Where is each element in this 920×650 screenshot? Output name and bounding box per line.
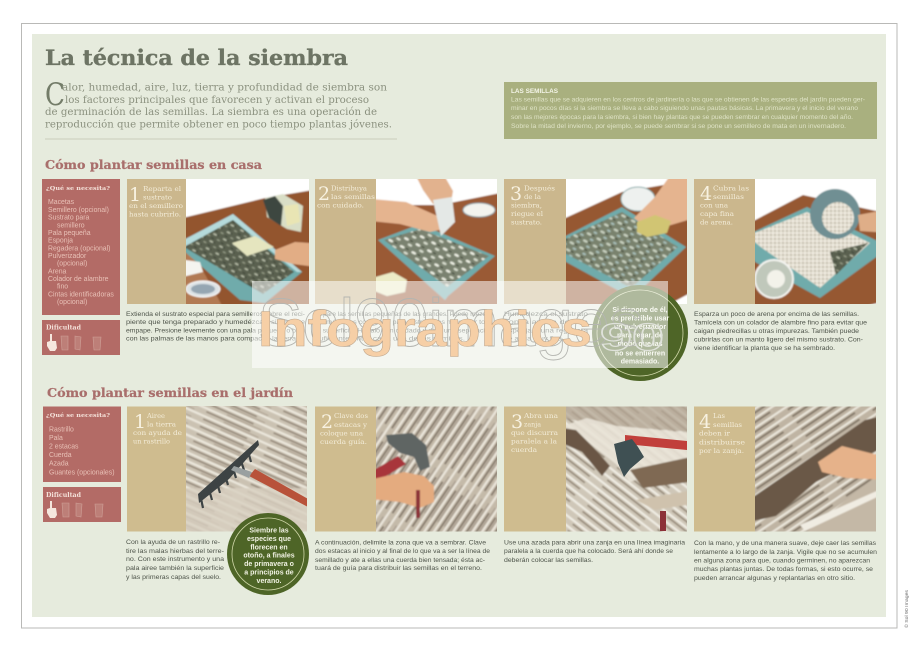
description: paralela a la cuerda que ha colocado. Será ahí donde se (504, 548, 673, 555)
step 2 jardin: coloque una (320, 430, 363, 438)
step 3 casa: de la (524, 193, 541, 201)
panel: las semillas: Sobre la mitad del invierno, por ejemplo, se puede sembrar si se pone un semillero de mata en un invernadero. (511, 123, 846, 130)
step 4 casa: con una (700, 202, 728, 210)
illustration: sieve and sand (755, 179, 876, 304)
illustration: sowing seeds (376, 179, 497, 304)
description: empape. Presione levemente con una pala pequeña o bien (126, 328, 305, 334)
illustration: watering with sponge (566, 179, 687, 304)
intro paragraph: los factores principales que favorecen y activan el proceso (65, 95, 369, 106)
illustration: rake (186, 406, 307, 532)
description: Con la ayuda de un rastrillo re- (126, 539, 220, 546)
description: cubrirlas con un manto ligero del mismo sustrato. Con- (694, 336, 863, 344)
step 4 jardin: distribuirse (699, 438, 745, 446)
description: Con la mano, y de una manera suave, deje caer las semillas (694, 540, 877, 547)
description: con la ayuda de una (504, 319, 589, 326)
description: Tamícela con un colador de alambre fino para evitar que (694, 320, 867, 326)
step 4 jardin: deben ir (699, 430, 731, 438)
description: caigan piedrecillas u otras impurezas. También puede (694, 328, 859, 335)
step 1 jardin: con ayuda de (133, 429, 182, 437)
panel: materiales casa: Macetas (48, 199, 75, 206)
description: Separe las semillas pequeñas de las grandes. Puede mezclar (315, 311, 494, 318)
panel: materiales jardin: Azada (49, 460, 69, 468)
callout: siembre: especies que (247, 536, 291, 543)
step 2 jardin: 2 (321, 411, 333, 433)
step 3 casa: riegue el (511, 210, 543, 218)
step 4 casa: 4 (700, 183, 712, 205)
step 4 casa: Cubra las (713, 184, 750, 192)
panel: materiales casa: Pala pequeña (48, 230, 91, 237)
description: y las primeras capas del suelo. (126, 574, 221, 581)
panel: materiales casa: Cintas identificadoras (48, 292, 114, 298)
description: con las palmas de las manos para compactar la tierra. (126, 336, 298, 342)
panel: materiales casa: Pulverizador (48, 253, 87, 260)
watermark: Infographics (258, 301, 592, 357)
step 2 jardin (315, 390, 515, 572)
step 2 casa: Distribuya (331, 184, 367, 192)
step 2 jardin: Clave dos (334, 412, 369, 420)
step 1 casa: Reparta el (143, 185, 181, 193)
step 1 casa: en el semillero (129, 202, 183, 210)
step 4 jardin: 4 (699, 411, 711, 433)
description (694, 540, 877, 582)
step 4 casa: capa fina (700, 210, 734, 218)
intro paragraph: de germinación de las semillas. La siembra es una operación de (45, 107, 377, 118)
step 3 jardin: Abra una (523, 412, 558, 420)
illustration: hoe and furrow (566, 406, 687, 532)
description: Use una azada para abrir una zanja en una línea imaginaria (504, 540, 685, 546)
panel: materiales jardin: Cuerda (49, 452, 72, 459)
panel: materiales casa: Arena (48, 268, 67, 275)
description: dos estacas al inicio y al final de lo que va a ser la línea de (315, 548, 490, 555)
callout: riego: no se entierren (615, 350, 665, 358)
step 1 casa: sustrato (143, 194, 172, 202)
watermark: Sol90images (258, 285, 643, 361)
intro paragraph: alor, humedad, aire, luz, tierra y profundidad de siembra son (62, 82, 388, 94)
step 1 jardin (126, 390, 325, 581)
panel: materiales jardin: Guantes (opcionales) (49, 470, 114, 476)
credit: © Sol 90 Images (903, 589, 909, 628)
description: piente que tenga preparado y humedézcalo sin que se (126, 319, 305, 326)
step 1 casa: 1 (129, 184, 141, 206)
description (504, 540, 685, 564)
callout: riego: para regar, de (617, 332, 663, 340)
step 3 jardin (504, 390, 705, 564)
callout: riego: un pulverizador (614, 324, 666, 331)
description: Humedezca el sustrato (504, 311, 588, 318)
step 3 casa: sustrato. (511, 218, 542, 226)
callout: riego (592, 285, 688, 381)
title: La técnica de la siembra (45, 46, 348, 71)
panel: materiales jardin: Rastrillo (49, 426, 74, 434)
panel: materiales casa: semillero (57, 222, 85, 229)
description: esponja o una regadera (504, 328, 588, 334)
callout: siembre (227, 513, 309, 595)
step 1 jardin: un rastrillo (133, 438, 170, 446)
description: en alguna zona para que, cuando germinen, no aparezcan (694, 558, 870, 564)
panel: materiales casa: Semillero (opcional) (48, 207, 109, 214)
step 2 casa: con cuidado. (317, 202, 364, 210)
panel: materiales jardin: ¿Qué se necesita? (46, 412, 111, 419)
panel: dificultad casa (42, 320, 120, 355)
heading: en casa: Cómo plantar semillas en casa (45, 157, 262, 172)
drop capital: C (45, 77, 65, 113)
description (694, 311, 867, 352)
illustration: tray and spoon (186, 179, 309, 304)
step 4 jardin (694, 390, 890, 582)
step 1 jardin: 1 (134, 411, 146, 433)
callout: siembre: otoño, a finales (243, 552, 295, 560)
callout: siembre: a principios de (244, 570, 294, 576)
description: suficiente entre cada una de las semillas. (315, 336, 465, 342)
step 3 casa (504, 165, 705, 342)
panel: dificultad casa: Dificultad (46, 324, 81, 332)
description (126, 539, 224, 581)
description: no. Con este instrumento y una (126, 556, 224, 563)
panel: dificultad jardin: Dificultad (46, 491, 81, 499)
step 1 casa: hasta cubrirlo. (129, 210, 181, 218)
panel: las semillas: LAS SEMILLAS (511, 88, 559, 95)
illustration: hand and furrow (755, 406, 876, 532)
description: viene identificar la planta que se ha sembrado. (694, 345, 835, 352)
step 2 casa: las semillas (331, 193, 376, 201)
step 3 casa: Después (524, 184, 556, 192)
panel: materiales casa: fino (57, 284, 68, 291)
panel: las semillas: minar en pocos días si la siembra se lleva a cabo siguiendo unas pautas básicas. La primavera y el inicio del verano (511, 105, 859, 112)
step 4 jardin: por la zanja. (699, 447, 744, 455)
illustration: hammer and stake (376, 406, 497, 532)
description: semillado y ate a ellas una cuerda bien tensada; ésta ac- (315, 557, 485, 564)
description: Esparza un poco de arena por encima de las semillas. (694, 311, 859, 318)
callout: siembre: de primavera o (244, 561, 294, 568)
callout: siembre: florecen en (250, 544, 288, 552)
description: pueden arrancar algunas y replantarlas en otro sitio. (694, 575, 855, 582)
step 3 casa: siembra, (511, 202, 542, 210)
step 4 casa (694, 165, 890, 352)
description (504, 311, 589, 342)
step 4 casa: semillas (713, 193, 745, 201)
callout: riego: modo que las (617, 341, 663, 348)
panel: materiales casa: Esponja (48, 238, 73, 245)
panel: materiales jardin: Pala (49, 435, 63, 442)
panel: materiales casa: Regadera (opcional) (48, 245, 110, 252)
intro paragraph (45, 77, 392, 130)
heading: en el jardin: Cómo plantar semillas en el jardín (47, 385, 293, 400)
callout: riego: Si dispone de él, (612, 307, 668, 314)
step 2 casa: 2 (318, 183, 330, 205)
panel: materiales jardin: 2 estacas (49, 444, 79, 450)
step 1 jardin: la tierra (147, 420, 176, 428)
description: las más finas con arena para distribuirlas mejor por toda (315, 319, 493, 326)
step 4 jardin: semillas (713, 421, 743, 429)
step 3 jardin: paralela a la (511, 438, 557, 446)
panel: las semillas: Las semillas que se adquieren en los centros de jardinería o las que se obtienen de las especies del jardín pueden ger- (511, 96, 865, 104)
step 4 jardin: Las (713, 412, 726, 420)
step 2 casa (315, 165, 515, 342)
panel: materiales casa: (opcional) (57, 261, 87, 268)
step 3 jardin: que discurra (511, 429, 558, 437)
step 2 jardin: estacas y (334, 421, 367, 429)
callout: siembre: Siembre las (249, 528, 289, 534)
description: deberán colocar las semillas. (504, 557, 593, 564)
step 3 jardin: 3 (511, 411, 523, 433)
description (126, 311, 305, 342)
step 3 jardin: zanja (524, 420, 541, 428)
description: A continuación, delimite la zona que va a sembrar. Clave (315, 540, 486, 546)
description: tuará de guía para distribuir las semillas en el terreno. (315, 565, 482, 572)
icon: hands difficulty (47, 501, 103, 518)
panel: materiales jardin (43, 406, 121, 482)
panel: materiales casa: ¿Qué se necesita? (46, 185, 111, 192)
description: de agua muy fina. (504, 336, 564, 342)
callout: riego: demasiado. (621, 358, 659, 366)
callout: siembre: verano. (257, 578, 282, 585)
callout: riego: es preferible usar (611, 316, 669, 322)
panel: las semillas: son las mejores épocas para la siembra, si bien hay plantas que se pueden sembrar en cualquier momento del año. (511, 114, 853, 121)
panel: materiales casa: Colador de alambre (48, 276, 109, 283)
description: pala airee también la superficie (126, 565, 224, 572)
description: Extienda el sustrato especial para semilleros sobre el reci- (126, 311, 305, 318)
icon: hands difficulty (47, 334, 101, 351)
step 3 casa: 3 (510, 183, 522, 205)
step 2 jardin: cuerda guía. (320, 438, 367, 446)
description: lentamente a lo largo de la zanja. Vigile que no se acumulen (694, 549, 877, 556)
step 4 casa: de arena. (700, 218, 733, 226)
step 3 jardin: cuerda (511, 446, 537, 454)
description: tire las malas hierbas del terre- (126, 548, 224, 555)
description (315, 540, 490, 572)
panel: materiales casa (42, 179, 120, 315)
description: la superficie. Hágalo con cuidado y deje una separación (315, 328, 493, 334)
panel: las semillas (504, 82, 877, 139)
step 1 casa (126, 165, 325, 342)
panel: materiales casa: (opcional) (57, 299, 87, 306)
panel: materiales casa: Sustrato para (48, 215, 90, 222)
watermark: 90 (600, 317, 664, 359)
step 1 jardin: Airee (146, 412, 165, 420)
description: muchas plantas juntas. De todas formas, si esto ocurre, se (694, 566, 873, 573)
description (315, 311, 494, 342)
intro paragraph: reproducción que permite obtener en poco tiempo plantas jóvenes. (45, 120, 392, 130)
panel: dificultad jardin (43, 487, 121, 522)
